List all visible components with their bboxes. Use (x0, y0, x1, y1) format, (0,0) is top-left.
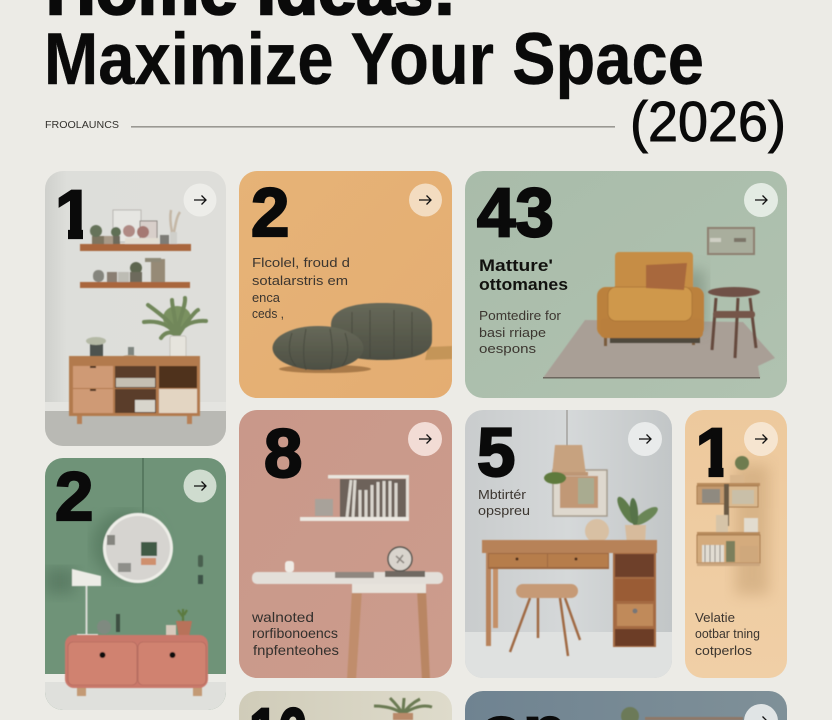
text block: oespons (479, 341, 537, 356)
arrow button (744, 422, 778, 456)
panel 1: shelves and sideboard (45, 171, 226, 446)
panel 8: cropped plant card (239, 691, 452, 720)
illustration: wall art (707, 227, 755, 255)
number 5: 5 (477, 414, 515, 491)
arrow button (408, 422, 442, 456)
illustration: wall shelf with books (300, 475, 409, 521)
panel 6: study desk (465, 410, 672, 678)
text block: walnoted (251, 609, 314, 625)
number 8: 8 (264, 415, 302, 492)
text block: Flcolel, froud d (252, 255, 350, 270)
number 1: 1 (696, 414, 734, 491)
illustration: plant (374, 698, 432, 720)
text block: Velatie (695, 610, 735, 625)
text block: opspreu (478, 503, 530, 518)
text block: Mbtirtér (478, 487, 527, 502)
text block (695, 610, 760, 658)
text block: basi rriape (479, 325, 546, 340)
text block (479, 308, 562, 356)
panel 9: cropped blue-grey card (465, 691, 787, 720)
illustration: lamp (45, 568, 101, 637)
illustration: wall shelves (697, 456, 760, 566)
arrow button (744, 704, 778, 720)
illustration: desk (252, 547, 443, 680)
text block (252, 255, 350, 321)
heading (479, 257, 568, 294)
panel 7: narrow wall shelf (685, 410, 787, 678)
illustration: sideboard (69, 356, 200, 424)
illustration: console cabinet (65, 635, 208, 696)
illustration: vase and plant (584, 496, 658, 540)
heading: Matture' (479, 257, 553, 275)
text block: fnpfenteohes (253, 642, 339, 658)
panel 5: wall desk (239, 410, 452, 680)
arrow button (628, 422, 662, 456)
text block: enca (252, 290, 281, 305)
illustration: pendant lamp (544, 445, 588, 484)
illustration: plant and shelf (621, 707, 743, 720)
illustration: two poufs (272, 303, 452, 373)
illustration: desk (482, 540, 657, 647)
number 2: 2 (55, 458, 93, 535)
illustration: decor on console (97, 555, 203, 637)
number 2: 2 (251, 174, 289, 251)
illustration: side table (708, 287, 760, 358)
text block: sotalarstris em (252, 273, 348, 288)
number 43: 43 (477, 174, 554, 251)
header rule (131, 126, 615, 128)
illustration: rug (543, 320, 775, 378)
text block: ceds , (252, 306, 284, 321)
arrow button (744, 183, 778, 217)
header label: FROOLAUNCS (45, 119, 119, 131)
arrow button (184, 184, 216, 216)
heading: ottomanes (479, 276, 568, 294)
illustration: armchair (597, 252, 705, 346)
text block (251, 609, 339, 658)
arrow button (184, 470, 216, 502)
number 1: 1 (55, 176, 93, 253)
text block (478, 487, 530, 518)
title year: (2026) (630, 90, 786, 154)
illustration: stool (510, 584, 580, 656)
illustration: potted fern (86, 298, 206, 359)
text block: cotperlos (695, 643, 753, 658)
text block: Pomtedire for (479, 308, 562, 323)
illustration: wall shelves with decor (80, 210, 191, 288)
arrow button (409, 184, 442, 216)
panel 3: armchair (465, 171, 787, 398)
illustration: round mirror (92, 511, 173, 583)
text block: rorfibonoencs (252, 625, 338, 641)
illustration: framed picture (553, 470, 607, 516)
panel 4: mirror and console (45, 458, 226, 710)
title line: Maximize Your Space: Maximize Your Space (44, 19, 704, 100)
panel 2: poufs (239, 171, 452, 398)
text block: ootbar tning (695, 626, 760, 641)
